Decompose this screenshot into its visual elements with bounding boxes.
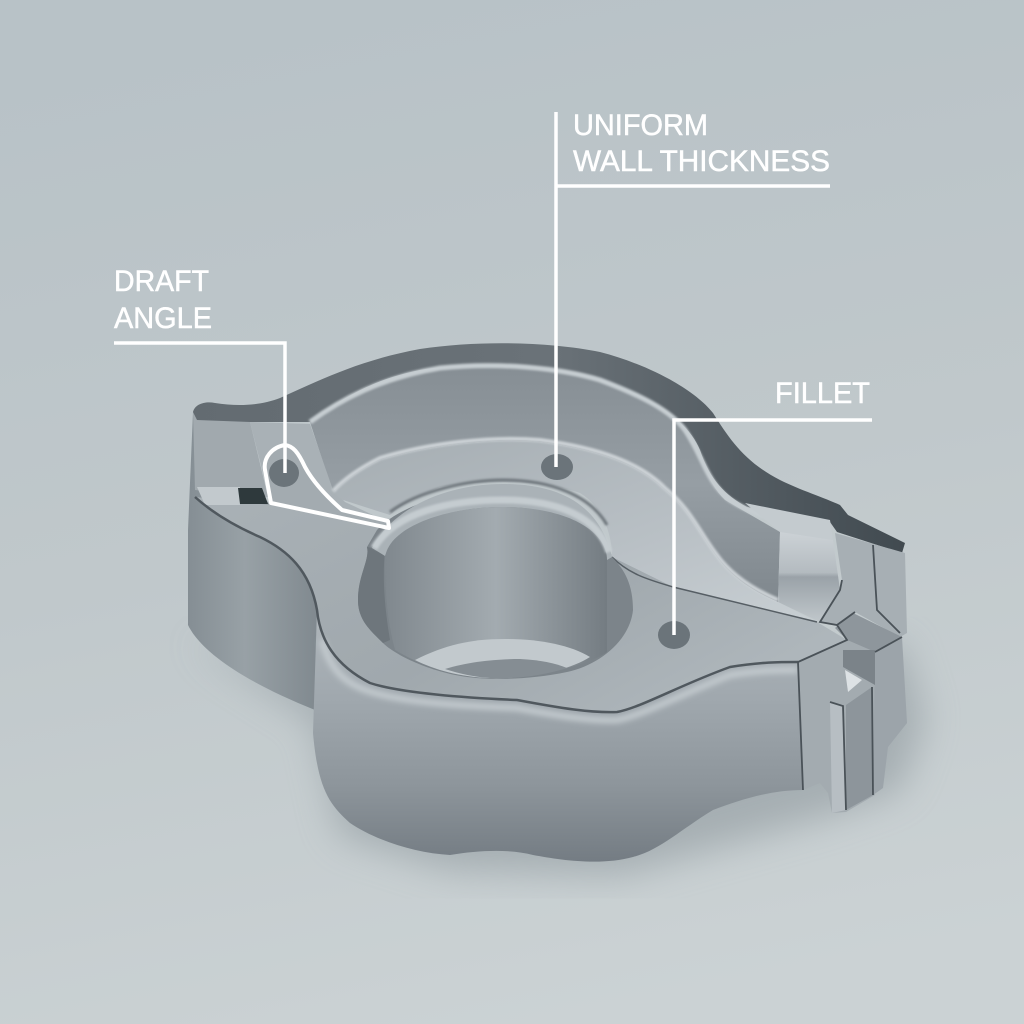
left facet	[250, 422, 388, 522]
upper left block	[193, 412, 268, 497]
upper ring highlight	[310, 366, 780, 520]
draft outline	[265, 445, 389, 528]
part detail lines	[798, 545, 902, 810]
shelf edge line	[612, 557, 817, 622]
callout: draft angle	[114, 265, 389, 528]
callout: uniform wall thickness: WALL THICKNESS	[573, 145, 830, 178]
right pad	[778, 532, 840, 622]
bowl wall	[310, 366, 780, 602]
front wall highlight	[322, 640, 798, 720]
callout: fillet	[658, 377, 872, 649]
hole rim band	[372, 484, 612, 560]
label: FILLET	[775, 377, 870, 410]
light strip	[830, 702, 846, 813]
hole left shading	[358, 547, 390, 643]
leader line	[674, 420, 872, 635]
front edge line	[195, 497, 798, 712]
cap block	[835, 613, 902, 652]
front corner block	[798, 640, 875, 813]
hole floor ring	[415, 639, 590, 678]
hole rim highlight	[374, 500, 609, 552]
left notch dark	[238, 488, 268, 504]
marker	[658, 621, 690, 649]
dark top rim	[193, 343, 905, 553]
notch opening	[845, 670, 862, 692]
right upper blocks	[820, 533, 907, 637]
top face	[195, 497, 847, 712]
leader line	[114, 343, 285, 473]
lower ring highlight	[333, 439, 778, 600]
leader line	[556, 112, 830, 467]
marker	[269, 459, 299, 487]
ledge	[745, 503, 833, 540]
notch pocket	[843, 650, 875, 685]
left notch light	[197, 487, 240, 505]
hole floor	[445, 659, 567, 678]
label: UNIFORM	[573, 109, 708, 142]
ground shadow	[190, 640, 925, 875]
hole rim dark line	[390, 480, 607, 525]
label: DRAFT	[114, 265, 209, 298]
callout: draft angle: ANGLE	[114, 302, 212, 335]
shelf	[333, 441, 817, 622]
callout: uniform wall thickness	[541, 109, 830, 480]
hole outer	[358, 490, 633, 679]
cylinder	[385, 507, 607, 678]
left wall	[188, 412, 330, 710]
right lower block	[873, 637, 907, 795]
marker	[541, 454, 573, 480]
slot strip	[846, 687, 873, 810]
machined part	[188, 343, 907, 862]
front wall	[313, 610, 803, 862]
